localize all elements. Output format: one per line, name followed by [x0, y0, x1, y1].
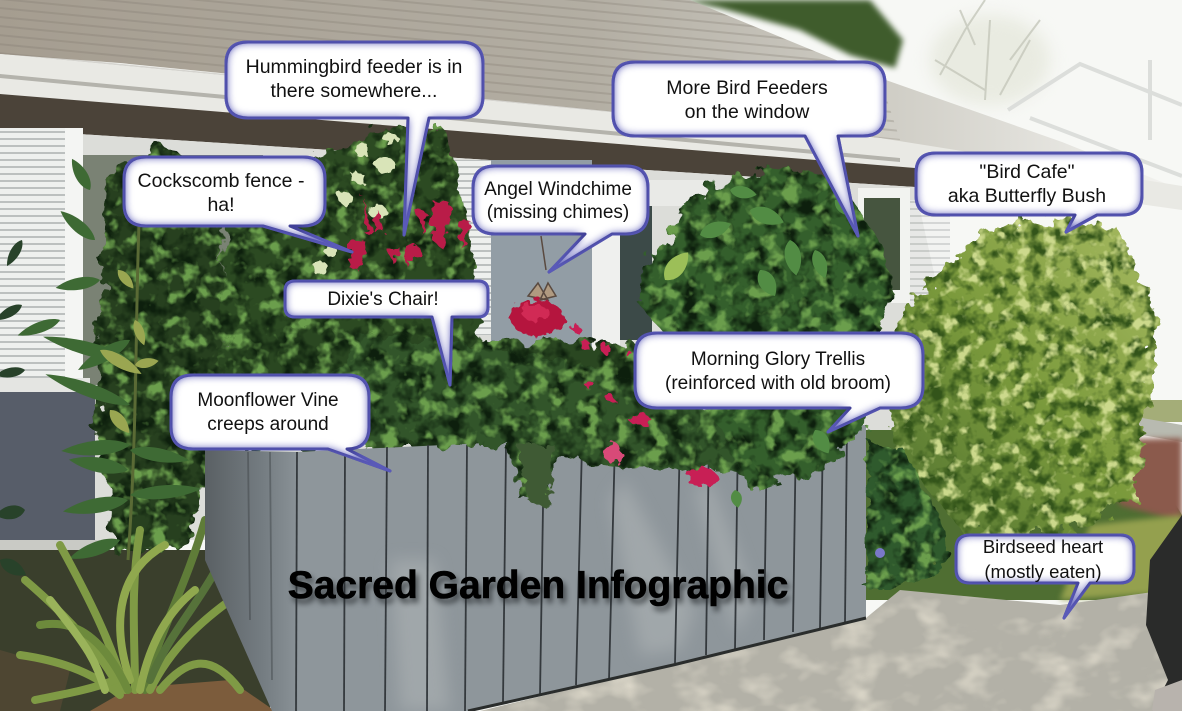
- callout: cockscomb fence: [124, 157, 352, 252]
- hanging vine: [518, 445, 555, 510]
- callout text: creeps around: [207, 414, 329, 435]
- flowers: pink blooms: [571, 324, 718, 487]
- callout text: there somewhere...: [271, 80, 437, 102]
- callout text: Moonflower Vine: [197, 390, 339, 411]
- yard right: [866, 400, 1182, 600]
- fence front: [296, 425, 866, 711]
- lower right shrub: [866, 440, 950, 590]
- pavement: [480, 588, 1182, 711]
- round morning glory bush: [635, 165, 895, 509]
- callout text: aka Butterfly Bush: [948, 185, 1106, 207]
- callout text: on the window: [685, 101, 810, 123]
- callout text: Birdseed heart: [983, 536, 1103, 557]
- left plant: [16, 145, 225, 565]
- flowers: cockscomb: [350, 195, 472, 272]
- roof: [0, 0, 1182, 210]
- title: Sacred Garden Infographic: [288, 564, 788, 607]
- callout text: (missing chimes): [487, 202, 629, 223]
- callout: moonflower vine: [171, 375, 390, 471]
- callout text: More Bird Feeders: [666, 77, 828, 99]
- title: Sacred Garden Infographic: [291, 569, 791, 612]
- shadow beam under eave: [0, 94, 915, 187]
- background trees: [680, 0, 1050, 105]
- lower wall: [0, 392, 100, 556]
- garden center foliage: [320, 335, 780, 500]
- fence side: [205, 450, 300, 711]
- upper vine foliage: [220, 125, 480, 350]
- flowers: red cockscomb cluster: [510, 300, 564, 336]
- right window: [858, 188, 950, 310]
- fence sunlight patches: [390, 480, 755, 711]
- callout text: ha!: [207, 194, 235, 216]
- callout: birdseed heart: [956, 535, 1134, 618]
- house wall: [0, 129, 940, 540]
- garden center backing foliage: [215, 325, 640, 450]
- callout: dixie's chair: [285, 281, 488, 385]
- callout: bird cafe: [916, 153, 1142, 232]
- callout text: (reinforced with old broom): [665, 373, 891, 394]
- callout text: "Bird Cafe": [979, 161, 1075, 183]
- pale sunlit leaves: [312, 134, 399, 275]
- callout text: Dixie's Chair!: [327, 289, 439, 310]
- ground left: [0, 550, 275, 711]
- door: [491, 160, 710, 355]
- callout text: Morning Glory Trellis: [691, 349, 865, 370]
- gutter and fascia: [0, 54, 1182, 210]
- callout: hummingbird feeder: [226, 42, 483, 235]
- callout text: Angel Windchime: [484, 179, 632, 200]
- left window shutter: [0, 128, 263, 392]
- right shutter: [445, 160, 491, 335]
- callout: more bird feeders: [613, 62, 885, 236]
- neighbouring house: [1008, 60, 1182, 176]
- angel windchime: [528, 236, 556, 300]
- iris leaves: [20, 520, 245, 700]
- callout: angel windchime: [473, 166, 648, 272]
- callout text: Cockscomb fence -: [138, 170, 304, 192]
- flower: morning glory: [875, 548, 885, 558]
- left edge plant: [0, 238, 29, 581]
- right butterfly bush: [885, 218, 1158, 535]
- fence base shadow: [468, 618, 866, 711]
- callout: morning glory trellis: [635, 333, 923, 432]
- callout text: (mostly eaten): [984, 561, 1102, 582]
- dark object bottom right: [1146, 515, 1182, 711]
- fence plank lines: [248, 425, 847, 711]
- callout text: Hummingbird feeder is in: [246, 56, 462, 78]
